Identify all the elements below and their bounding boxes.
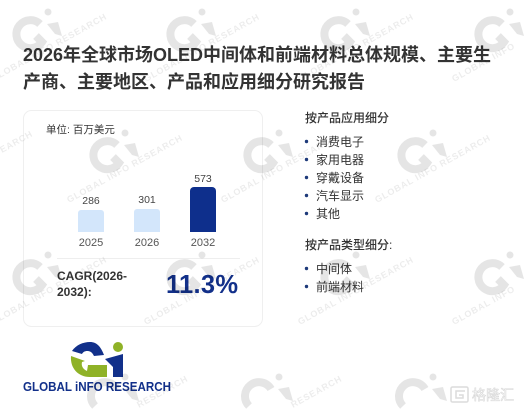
bar chart: 2026 [135, 237, 159, 249]
bar chart: 2025 [79, 237, 103, 249]
list: by product type: 前端材料 [316, 279, 364, 294]
bar chart [78, 173, 216, 249]
watermark pattern: GLOBAL INFO [450, 41, 517, 84]
watermark pattern: GLOBAL INFO RESEARCH [65, 133, 184, 205]
title: 产商、主要地区、产品和应用细分研究报告 [23, 71, 365, 92]
CAGR label: CAGR(2026- [57, 269, 127, 283]
watermark pattern: GLOBAL INFO RESEARCH [373, 133, 492, 205]
corner watermark: 格隆汇: 格隆汇 [472, 387, 514, 403]
unit label: 单位: 百万美元 [46, 123, 115, 136]
list: by application: 消费电子 [316, 135, 364, 149]
bar chart: 301 [138, 194, 156, 206]
bar chart: 573 [194, 173, 212, 185]
list: by application [305, 110, 389, 221]
list: by application: 其他 [316, 207, 340, 221]
list: by application: 家用电器 [316, 152, 364, 167]
CAGR label: 2032): [57, 285, 92, 299]
logo: Global Info Research [23, 342, 171, 394]
heading: application segment: 按产品应用细分 [305, 110, 389, 125]
watermark pattern: RESEARCH [289, 373, 344, 410]
corner watermark: 格隆汇 [451, 387, 514, 403]
list: by application: 穿戴设备 [316, 170, 364, 185]
list: by product type: 中间体 [316, 261, 352, 276]
watermark pattern: RESEARCH [135, 373, 190, 410]
heading: type segment: 按产品类型细分: [305, 237, 392, 252]
panel: market size card [24, 110, 262, 326]
watermark pattern: GLOBAL INFO RESEARCH [219, 133, 338, 205]
watermark pattern: GLOBAL INFO [450, 284, 517, 327]
list: by product type [305, 237, 392, 294]
list: by application: 汽车显示 [316, 188, 364, 203]
title: 2026年全球市场OLED中间体和前端材料总体规模、主要生 [23, 44, 491, 65]
logo: Global Info Research: GLOBAL iNFO RESEARCH [23, 380, 171, 394]
watermark pattern: GLOBAL INFO RESEARCH [296, 12, 415, 84]
watermark pattern: GLOBAL INFO RESEARCH [296, 255, 415, 327]
watermark pattern: GLOBAL INFO RESEARCH [142, 255, 261, 327]
bar chart: 2032 [191, 237, 215, 249]
CAGR value: 11.3% [166, 271, 238, 299]
watermark pattern: GLOBAL INFO RESEARCH [142, 12, 261, 84]
bar chart: 286 [82, 195, 100, 207]
